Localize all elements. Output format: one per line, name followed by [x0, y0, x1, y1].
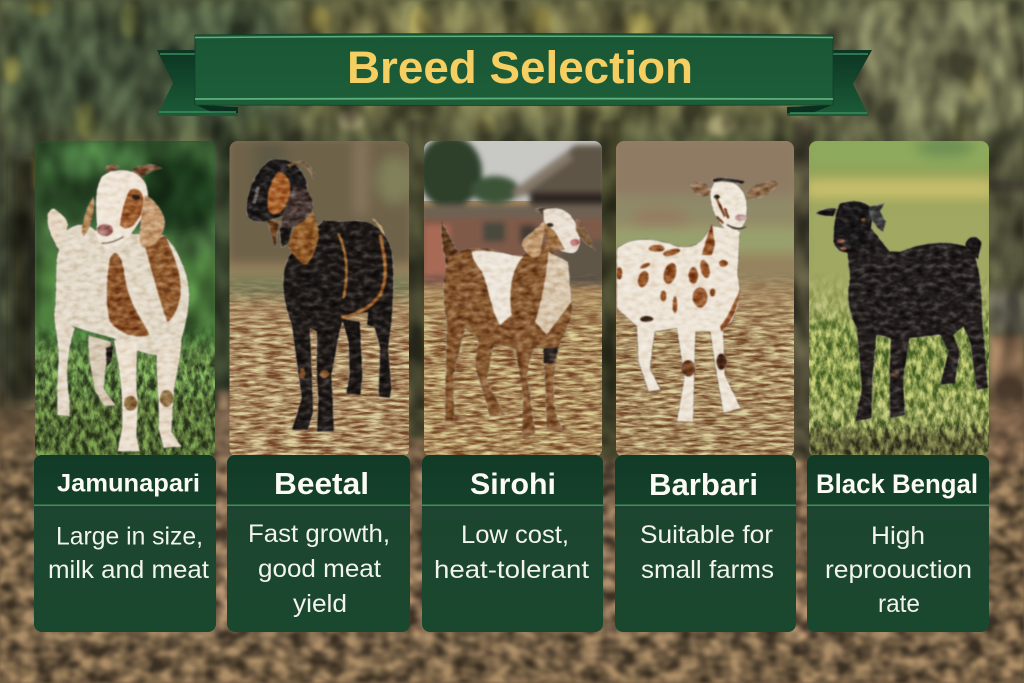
description: Fast growth, [248, 520, 390, 548]
card 3: Sirohi [418, 136, 610, 632]
breed name: Black Bengal [816, 469, 978, 499]
description: good meat [258, 555, 381, 583]
card 1: Jamunapari [30, 135, 220, 632]
description: heat-tolerant [434, 556, 589, 584]
card 4: Barbari [610, 135, 800, 632]
panel: Barbari [615, 455, 796, 632]
panel: Sirohi [422, 455, 603, 632]
card 5: Black Bengal [805, 135, 995, 632]
breed name: Beetal [274, 466, 369, 501]
description: rate [878, 590, 920, 618]
card 2: Beetal [225, 135, 415, 632]
photo: Barbari goat [610, 135, 800, 457]
description: Large in size, [56, 522, 203, 550]
description: yield [293, 590, 347, 618]
description: Low cost, [461, 521, 569, 549]
description: reproouction [825, 556, 972, 584]
panel: Black Bengal [807, 455, 989, 632]
photo: Black Bengal goat [805, 135, 995, 460]
panel: Beetal [227, 455, 410, 632]
description: milk and meat [48, 556, 209, 584]
title ribbon [157, 34, 872, 116]
panel: Jamunapari [34, 455, 216, 632]
ribbon right tail [787, 50, 872, 116]
description: small farms [641, 556, 774, 584]
ribbon left tail [157, 50, 238, 116]
description: Suitable for [640, 521, 773, 549]
photo: Beetal goat [225, 135, 415, 457]
breed name: Jamunapari [57, 470, 200, 498]
title: Breed Selection [347, 42, 693, 93]
description: High [871, 522, 925, 550]
ribbon main band [195, 34, 833, 106]
breed name: Barbari [649, 467, 758, 502]
breed name: Sirohi [470, 468, 556, 501]
photo: Sirohi goat [418, 136, 610, 457]
photo: Jamunapari goat [30, 135, 220, 460]
